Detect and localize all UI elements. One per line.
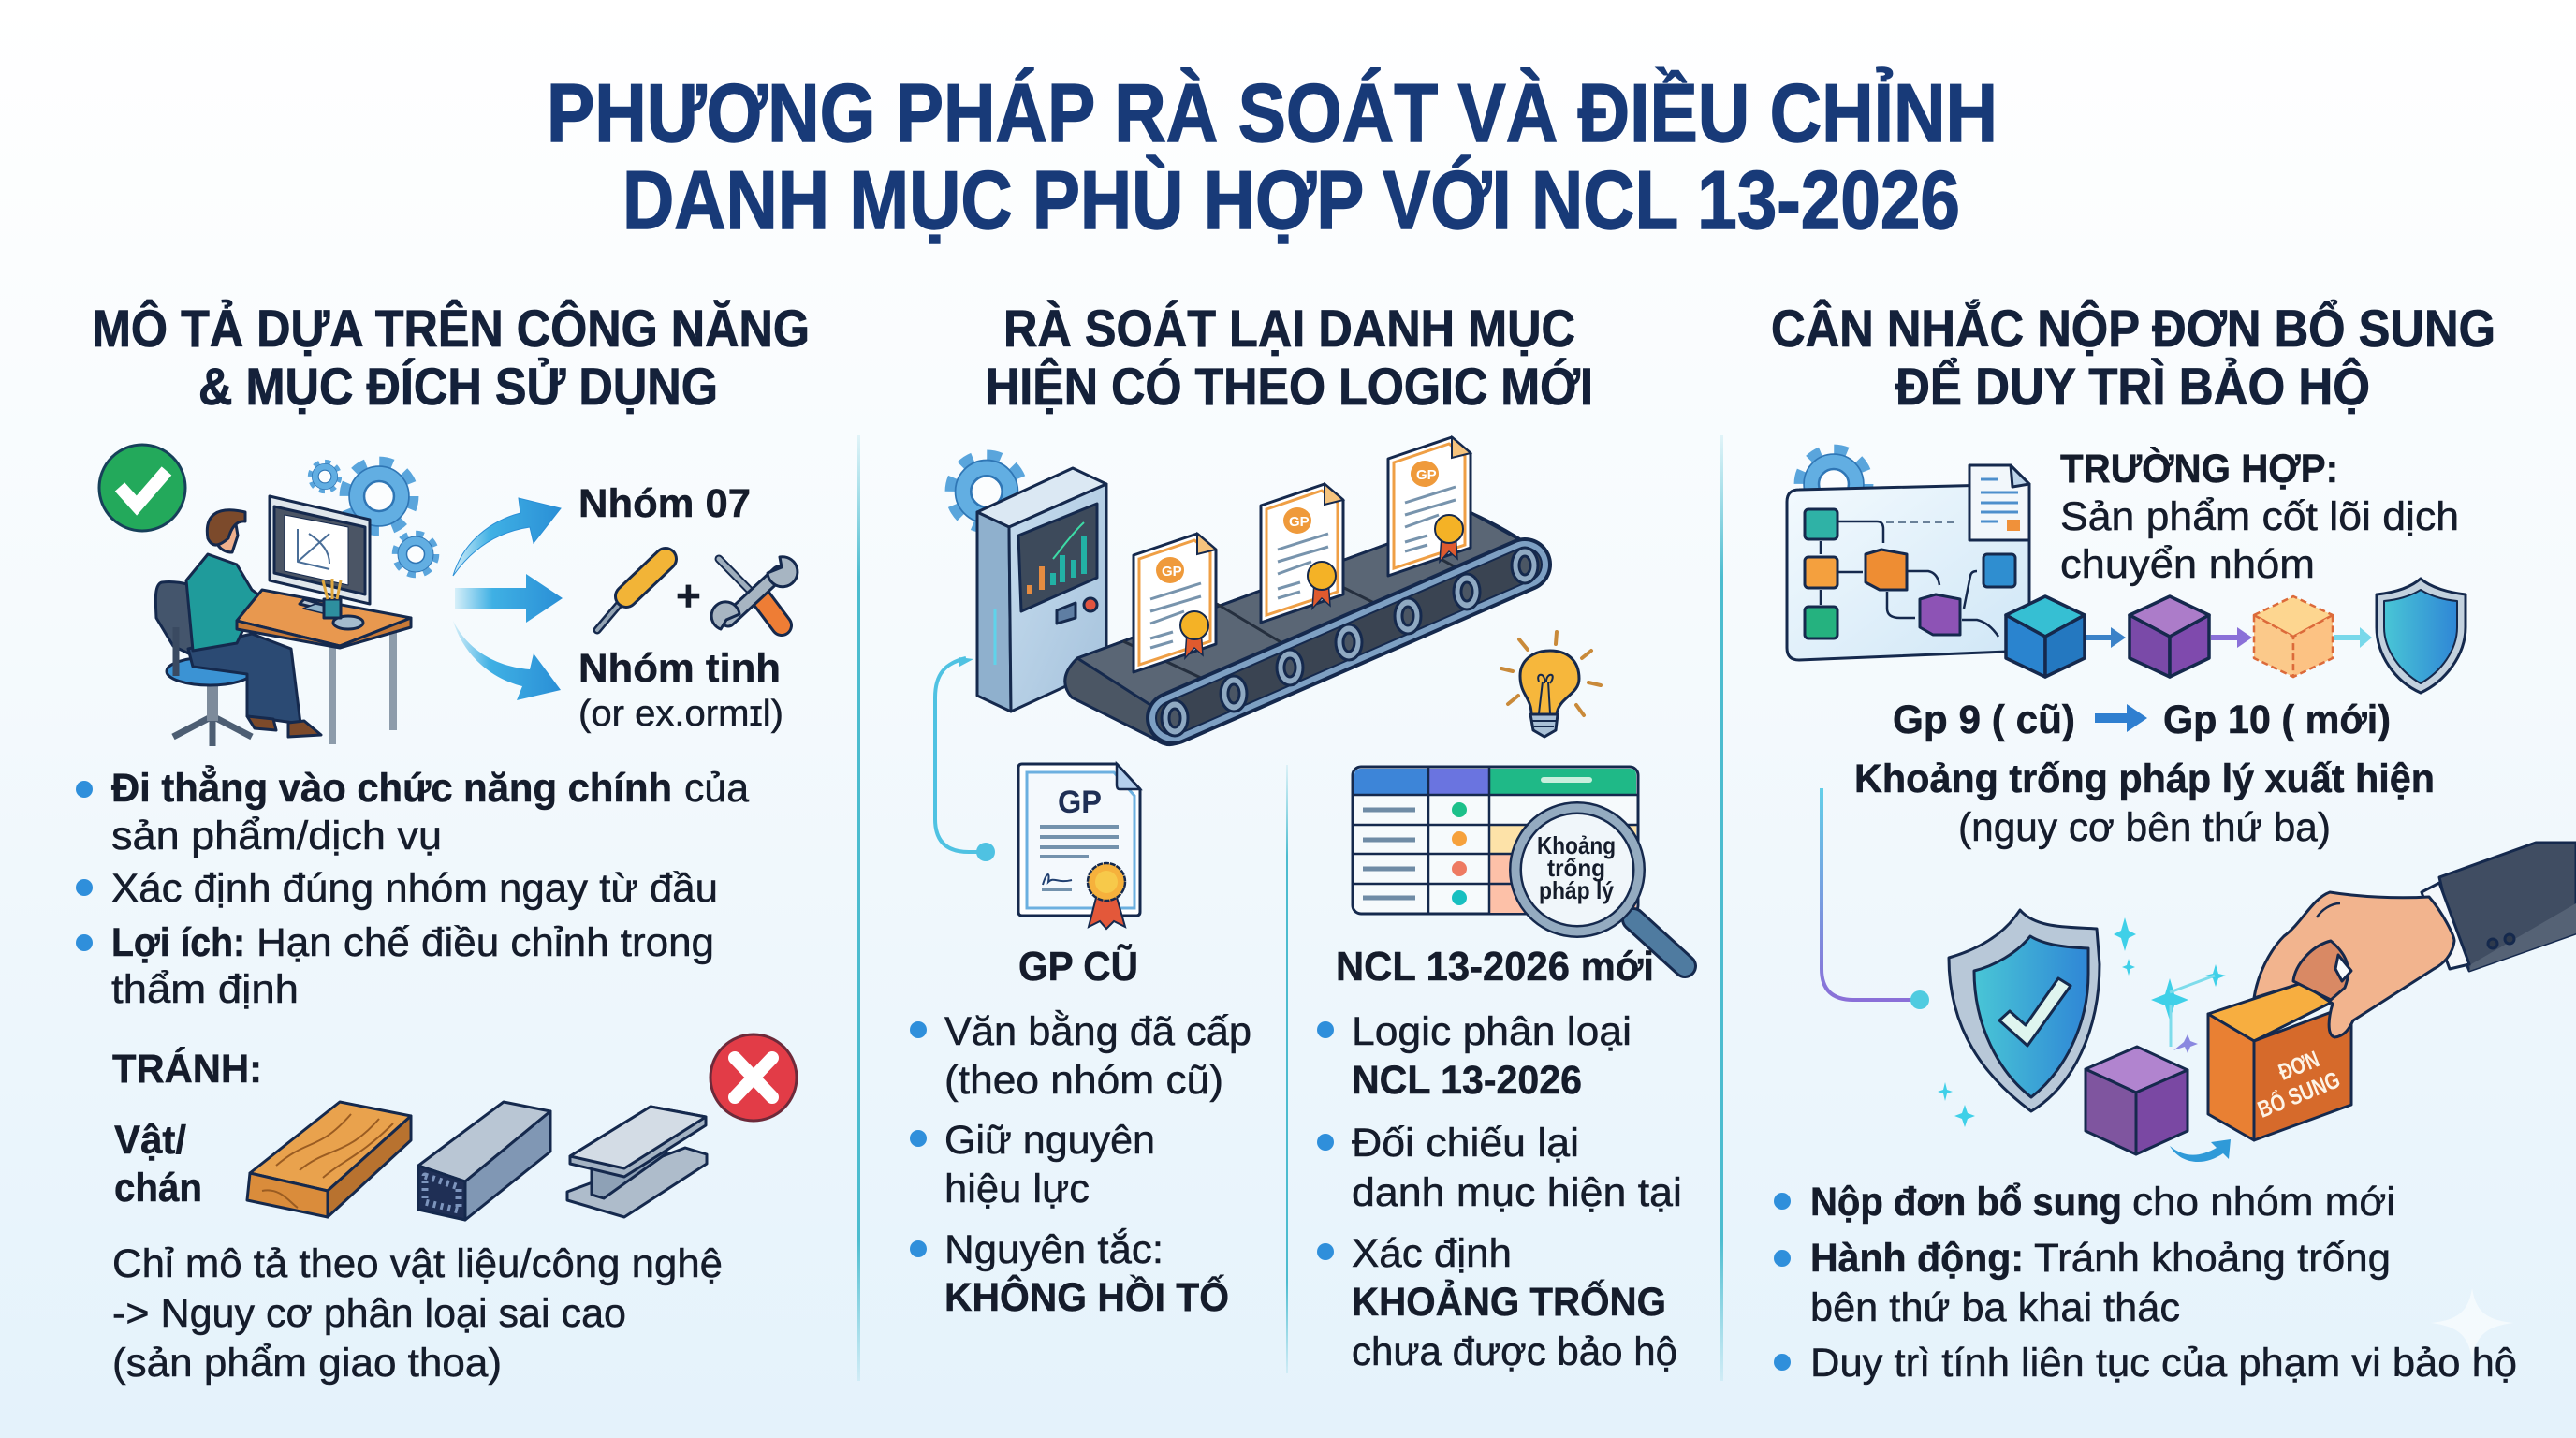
heading: column 2 — [986, 299, 1593, 416]
watermark sparkle — [2431, 1288, 2513, 1359]
bullet list: column 1: sản phẩm/dịch vụ — [111, 814, 442, 858]
icon: I-beam — [567, 1107, 707, 1217]
bullet list: NCL mới: danh mục hiện tại — [1352, 1170, 1682, 1215]
text: trường hợp — [2060, 446, 2459, 587]
title — [547, 66, 1998, 246]
panel: mô tả dựa trên công năng — [76, 299, 810, 1386]
arrow: blue — [2086, 627, 2126, 648]
icon: shield — [2377, 579, 2466, 693]
label: or ex.ormɪl: (or ex.ormɪl) — [578, 694, 783, 734]
text: legal gap: (nguy cơ bên thứ ba) — [1958, 805, 2331, 850]
label: vật/chán — [114, 1118, 202, 1211]
text: warning: -> Nguy cơ phân loại sai cao — [112, 1291, 626, 1336]
bullet list: column 3: bên thứ ba khai thác — [1810, 1285, 2180, 1330]
icon: metal tube — [418, 1102, 550, 1220]
bullet list: column 1: của — [684, 766, 749, 811]
heading: column 3: ĐỂ DUY TRÌ BẢO HỘ — [1895, 357, 2370, 416]
icon: certificate 3 — [1388, 437, 1471, 576]
bullet list: column 3: Tránh khoảng trống — [2034, 1236, 2391, 1281]
illustration: flow diagram panel — [1787, 465, 2029, 660]
label: Nhóm tinh: Nhóm tinh — [578, 646, 781, 691]
bullet list: column 3 — [1774, 1180, 2517, 1386]
bullet list: NCL mới: Đối chiếu lại — [1352, 1121, 1579, 1166]
icon: lightbulb — [1501, 632, 1601, 737]
bullet list: column 1: Xác định đúng nhóm ngay từ đầu — [111, 866, 718, 911]
illustration: blue cube — [2006, 596, 2085, 677]
icon: certificate 1: GP — [1162, 564, 1182, 580]
illustration: purple cube — [2130, 596, 2209, 677]
label: vật/chán: Vật/ — [114, 1118, 186, 1163]
bullet list: column 1: Hạn chế điều chỉnh trong — [256, 920, 714, 965]
bullet list: column 3: Duy trì tính liên tục của phạm vi bảo hộ — [1810, 1341, 2517, 1386]
sparkles — [1938, 917, 2226, 1127]
icon: large shield with check — [1949, 910, 2100, 1111]
bullet list: NCL mới: Logic phân loại — [1352, 1009, 1632, 1054]
text: warning: (sản phẩm giao thoa) — [112, 1341, 502, 1386]
bullet list: column 3: Hành động: — [1810, 1236, 2024, 1281]
text: warning — [112, 1241, 723, 1386]
text: warning: Chỉ mô tả theo vật liệu/công nghệ — [112, 1241, 723, 1286]
icon: red cross — [710, 1034, 797, 1121]
bullet list: column 1: Đi thẳng vào chức năng chính — [111, 764, 672, 811]
illustration: dashed orange cube — [2254, 596, 2333, 677]
bullet list: NCL mới — [1317, 1009, 1682, 1374]
illustration: person at desk — [155, 496, 411, 746]
icon: table with magnifier — [1353, 767, 1685, 966]
arrow: curved — [2170, 1139, 2231, 1162]
text: legal gap — [1854, 756, 2435, 850]
illustration: conveyor belt — [1065, 513, 1545, 745]
bullet list: column 3: Nộp đơn bổ sung — [1810, 1180, 2122, 1225]
icon: GP certificate — [1018, 764, 1140, 929]
bullet list: GP cũ: Nguyên tắc: — [944, 1227, 1164, 1272]
illustration: hand in suit — [2254, 843, 2576, 1037]
heading: tránh: TRÁNH: — [112, 1047, 262, 1092]
bullet list: column 1 — [76, 764, 749, 1012]
illustration: orange box đơn bổ sung — [2208, 983, 2351, 1140]
bullet list: GP cũ: Giữ nguyên — [944, 1118, 1155, 1163]
text: legal gap: Khoảng trống pháp lý xuất hiện — [1854, 756, 2435, 801]
heading: column 1: MÔ TẢ DỰA TRÊN CÔNG NĂNG — [92, 299, 810, 358]
plus sign: + — [676, 571, 701, 620]
label: Gp 9 to Gp 10 — [1893, 697, 2391, 742]
arrow: to Nhóm 07 — [453, 498, 561, 576]
bullet list: GP cũ: hiệu lực — [944, 1167, 1090, 1211]
icon: wood block — [247, 1102, 411, 1217]
bullet list: GP cũ: Văn bằng đã cấp — [944, 1009, 1251, 1054]
icon: certificate 3: GP — [1416, 467, 1437, 483]
heading: column 1: & MỤC ĐÍCH SỬ DỤNG — [198, 357, 718, 416]
title: PHƯƠNG PHÁP RÀ SOÁT VÀ ĐIỀU CHỈNH — [547, 66, 1998, 159]
bullet list: GP cũ: (theo nhóm cũ) — [944, 1058, 1223, 1103]
bullet list: NCL mới: NCL 13-2026 — [1352, 1058, 1582, 1103]
icon: certificate 2: GP — [1289, 514, 1310, 530]
bullet list: NCL mới: Xác định — [1352, 1231, 1512, 1276]
icon: table with magnifier: Khoảng — [1537, 831, 1616, 859]
arrow: cyan — [2334, 627, 2372, 648]
panel: rà soát lại danh mục — [910, 299, 1685, 1374]
bullet list: NCL mới: KHOẢNG TRỐNG — [1352, 1279, 1666, 1325]
icon: table with magnifier: pháp lý — [1539, 876, 1614, 904]
icon: gears — [310, 462, 436, 575]
text: trường hợp: Sản phẩm cốt lõi dịch — [2060, 494, 2459, 539]
label: NCL 13-2026 mới: NCL 13-2026 mới — [1336, 944, 1654, 990]
illustration: scanning machine — [977, 468, 1106, 712]
label: Gp 9 to Gp 10: Gp 10 ( mới) — [2163, 697, 2391, 742]
bullet list: GP cũ — [910, 1009, 1251, 1320]
heading: column 1 — [92, 299, 810, 416]
text: trường hợp: chuyển nhóm — [2060, 542, 2315, 587]
label: vật/chán: chán — [114, 1166, 202, 1211]
icon: table with magnifier: trống — [1547, 854, 1605, 882]
illustration: orange box đơn bổ sung: BỔ SUNG — [2253, 1065, 2344, 1123]
heading: column 3: CÂN NHẮC NỘP ĐƠN BỔ SUNG — [1771, 299, 2496, 358]
icon: green check — [99, 445, 185, 531]
icon: certificate 1 — [1134, 534, 1216, 672]
heading: column 3 — [1771, 299, 2496, 416]
title: DANH MỤC PHÙ HỢP VỚI NCL 13-2026 — [622, 154, 1960, 246]
heading: column 2: RÀ SOÁT LẠI DANH MỤC — [1003, 299, 1575, 358]
label: Gp 9 to Gp 10: Gp 9 ( cũ) — [1893, 697, 2075, 742]
icon: screwdriver — [597, 559, 666, 630]
label: Nhóm 07: Nhóm 07 — [578, 481, 751, 526]
bullet list: GP cũ: KHÔNG HỒI TỐ — [944, 1274, 1229, 1320]
arrow: to Nhóm tinh — [453, 621, 561, 700]
bullet list: column 3: cho nhóm mới — [2132, 1180, 2395, 1225]
arrow: purple — [2211, 627, 2252, 648]
illustration: orange box đơn bổ sung: ĐƠN — [2275, 1046, 2323, 1086]
arrow: connector to GP certificate — [935, 657, 995, 861]
text: trường hợp: TRƯỜNG HỢP: — [2060, 446, 2338, 492]
bullet list: column 1: Lợi ích: — [111, 920, 245, 965]
icon: tools — [711, 557, 798, 629]
icon: machine gear — [950, 455, 1023, 528]
panel: cân nhắc nộp đơn bổ sung — [1771, 299, 2576, 1386]
illustration: purple block — [2086, 1047, 2188, 1154]
icon: gear behind panel — [1799, 449, 1868, 519]
icon: GP certificate: GP — [1058, 785, 1102, 820]
heading: column 2: HIỆN CÓ THEO LOGIC MỚI — [986, 357, 1593, 416]
arrow: connector to shield — [1822, 788, 1929, 1009]
bullet list: column 1: thẩm định — [111, 967, 299, 1012]
bullet list: NCL mới: chưa được bảo hộ — [1352, 1329, 1677, 1374]
icon: certificate 2 — [1261, 484, 1343, 623]
label: GP CŨ: GP CŨ — [1018, 943, 1138, 990]
arrow: to tools — [455, 574, 563, 623]
